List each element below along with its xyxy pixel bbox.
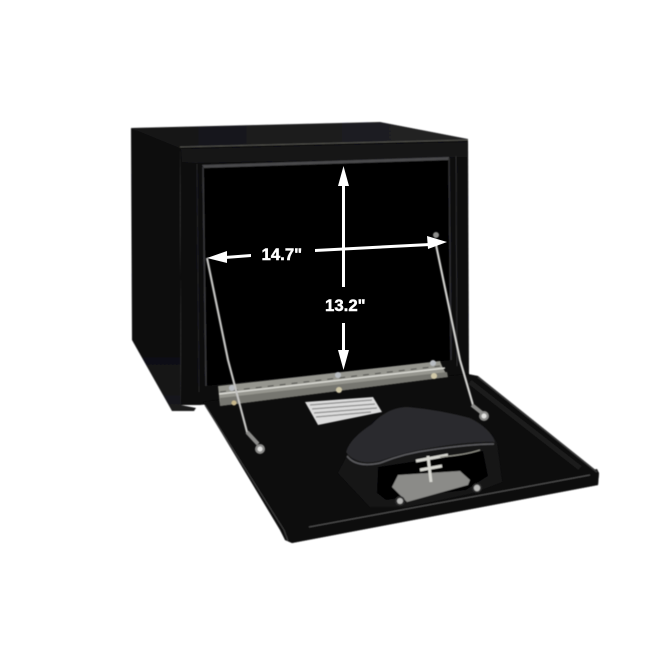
lock opening [377,451,488,500]
toolbox body [131,122,469,411]
left side face [131,128,196,411]
textured top face [346,407,495,462]
open door panel [203,374,599,543]
bolts [395,496,405,506]
top face [131,122,468,150]
lock cover [338,407,502,507]
warning sticker [305,397,382,425]
cover base and body [338,407,502,507]
hinge [218,360,448,406]
label: height 13.2: 13.2" [325,296,366,315]
left door strut [207,258,265,454]
cover lip highlight [347,444,494,464]
dimension: height arrow [338,166,349,370]
label: width 14.7: 14.7" [262,245,302,264]
dimension: width arrow [207,236,447,263]
front frame [180,140,469,405]
door opening [202,158,451,386]
right door strut [433,232,489,421]
metal plate [392,471,470,502]
latch [416,455,448,482]
